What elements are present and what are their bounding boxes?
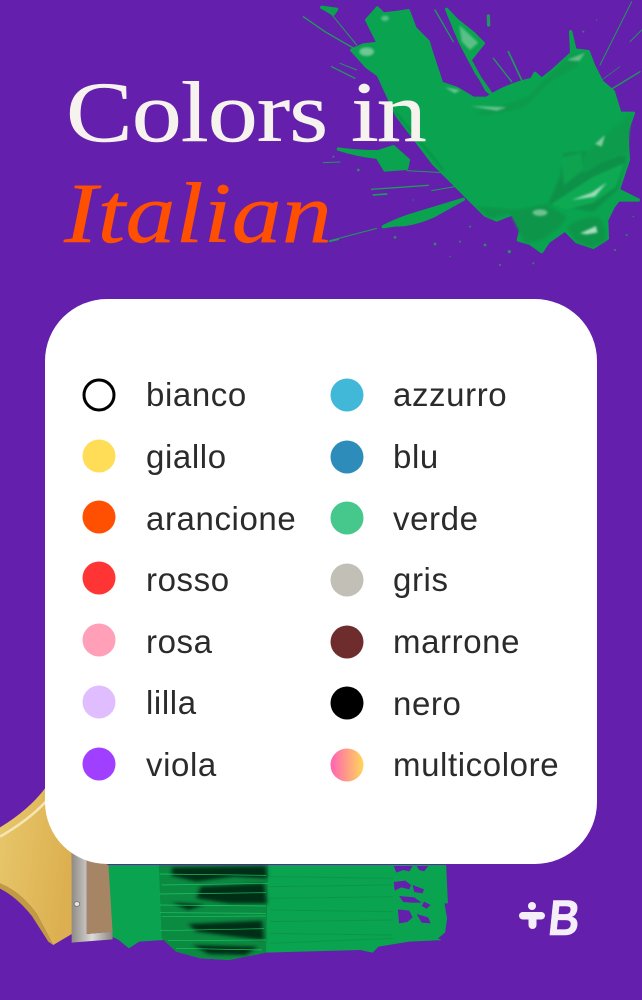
white card bbox=[45, 299, 597, 864]
item: blu bbox=[330, 438, 439, 475]
item: bianco: bianco bbox=[146, 376, 247, 413]
item: azzurro: azzurro bbox=[393, 376, 507, 413]
item: verde bbox=[330, 500, 479, 537]
item: viola bbox=[82, 746, 217, 783]
item: viola: viola bbox=[146, 746, 217, 783]
stroke texture bbox=[270, 877, 393, 943]
paint stroke dry end bbox=[394, 866, 450, 943]
logo mark: plus with dot bbox=[519, 902, 545, 929]
item: nero bbox=[330, 685, 461, 722]
logo letter: B bbox=[546, 890, 583, 946]
item: lilla bbox=[82, 684, 197, 721]
splash highlights bbox=[359, 16, 607, 234]
item: azzurro bbox=[330, 376, 507, 413]
item: arancione: arancione bbox=[146, 500, 296, 537]
item: marrone: marrone bbox=[393, 623, 520, 660]
handle bbox=[0, 788, 73, 945]
paint stroke bbox=[107, 865, 448, 960]
bristles bbox=[159, 865, 268, 960]
item: multicolore: multicolore bbox=[393, 746, 559, 783]
color list: left column bbox=[82, 376, 296, 783]
splash folds and shading bbox=[395, 53, 632, 247]
title bbox=[63, 65, 426, 261]
item: bianco bbox=[84, 376, 247, 413]
item: rosso bbox=[82, 561, 230, 598]
item: gris bbox=[330, 561, 449, 598]
logo bbox=[519, 890, 583, 946]
title: Colors in: Colors bbox=[66, 65, 327, 160]
title: Colors in: in bbox=[351, 65, 426, 160]
title: Italian: Italian bbox=[63, 166, 332, 261]
item: giallo bbox=[82, 438, 227, 475]
item: marrone bbox=[330, 623, 520, 660]
item: nero: nero bbox=[393, 685, 461, 722]
item: blu: blu bbox=[393, 438, 439, 475]
item: verde: verde bbox=[393, 500, 479, 537]
green paint splash bbox=[303, 2, 642, 266]
item: rosso: rosso bbox=[146, 561, 230, 598]
item: rosa: rosa bbox=[146, 623, 213, 660]
item: giallo: giallo bbox=[146, 438, 227, 475]
item: lilla: lilla bbox=[146, 684, 197, 721]
color list: right column bbox=[330, 376, 559, 783]
item: rosa bbox=[82, 623, 213, 660]
metal ferrule bbox=[72, 845, 113, 943]
paintbrush bbox=[0, 788, 450, 960]
item: gris: gris bbox=[393, 561, 449, 598]
